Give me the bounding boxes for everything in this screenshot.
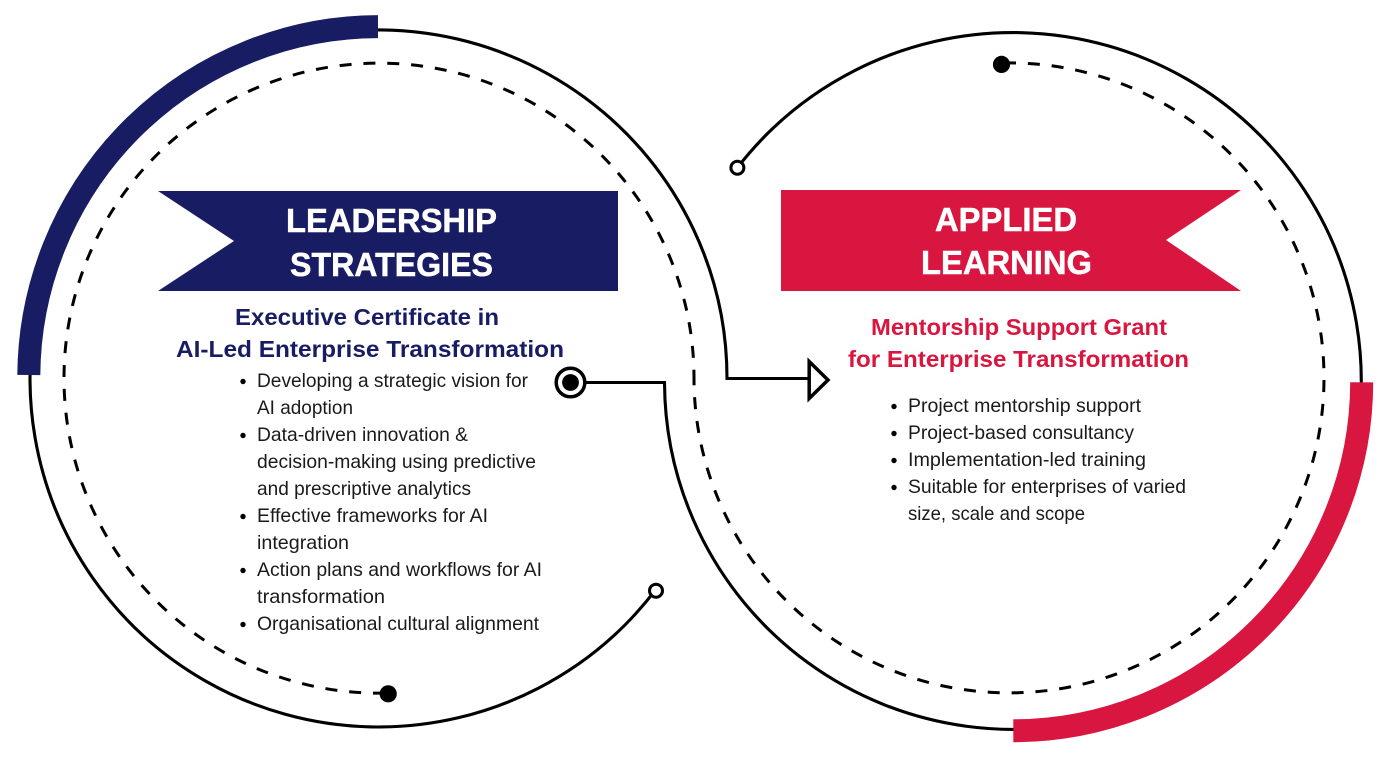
right bullet list: Project-based consultancy bbox=[908, 422, 1134, 444]
right bullet list: size, scale and scope bbox=[908, 503, 1085, 525]
left bullet list: Data-driven innovation & bbox=[257, 424, 468, 446]
left dashed ring bbox=[64, 63, 694, 693]
banner heading: LEADERSHIP bbox=[286, 203, 497, 240]
banner heading: APPLIED bbox=[935, 202, 1077, 239]
subheading: mentorship support grant: Mentorship Support Grant bbox=[871, 314, 1167, 340]
left bullet list bbox=[240, 370, 542, 635]
left bullet list: AI adoption bbox=[257, 397, 353, 419]
left bullet list: decision-making using predictive bbox=[257, 451, 536, 473]
banner heading: STRATEGIES bbox=[290, 247, 493, 284]
right bullet list: Project mentorship support bbox=[908, 395, 1142, 417]
left bullet list: Developing a strategic vision for bbox=[257, 370, 528, 392]
right solid ring with connector bbox=[585, 33, 1361, 729]
subheading: executive certificate bbox=[176, 304, 564, 362]
subheading: executive certificate: AI-Led Enterprise Transformation bbox=[176, 336, 564, 362]
subheading: mentorship support grant: for Enterprise Transformation bbox=[848, 346, 1189, 372]
red accent arc bbox=[1013, 382, 1362, 731]
left dashed end dot bbox=[380, 685, 397, 702]
navy accent arc bbox=[29, 27, 378, 375]
left bullet list: and prescriptive analytics bbox=[257, 478, 471, 500]
arrow head bbox=[809, 362, 828, 398]
right open end node bbox=[731, 161, 744, 174]
right bullet list: Implementation-led training bbox=[908, 449, 1146, 471]
left bullet list: integration bbox=[257, 532, 349, 554]
left bullet list: Organisational cultural alignment bbox=[257, 613, 540, 635]
left bullet list: transformation bbox=[257, 586, 385, 608]
target node bbox=[556, 368, 585, 397]
banner: leadership strategies bbox=[158, 191, 618, 291]
subheading: executive certificate: Executive Certificate in bbox=[235, 304, 499, 330]
left open end node bbox=[650, 584, 662, 597]
right bullet list bbox=[891, 395, 1186, 525]
right dashed end dot bbox=[993, 56, 1010, 73]
right bullet list: Suitable for enterprises of varied bbox=[908, 476, 1186, 498]
banner heading bbox=[286, 203, 497, 284]
banner heading: LEARNING bbox=[921, 245, 1092, 282]
banner: applied learning bbox=[781, 190, 1241, 291]
right dashed ring bbox=[694, 63, 1324, 693]
subheading: mentorship support grant bbox=[848, 314, 1189, 372]
left solid ring with arrow bbox=[30, 30, 809, 727]
left bullet list: Action plans and workflows for AI bbox=[257, 559, 542, 581]
left bullet list: Effective frameworks for AI bbox=[257, 505, 488, 527]
banner heading bbox=[921, 202, 1092, 282]
